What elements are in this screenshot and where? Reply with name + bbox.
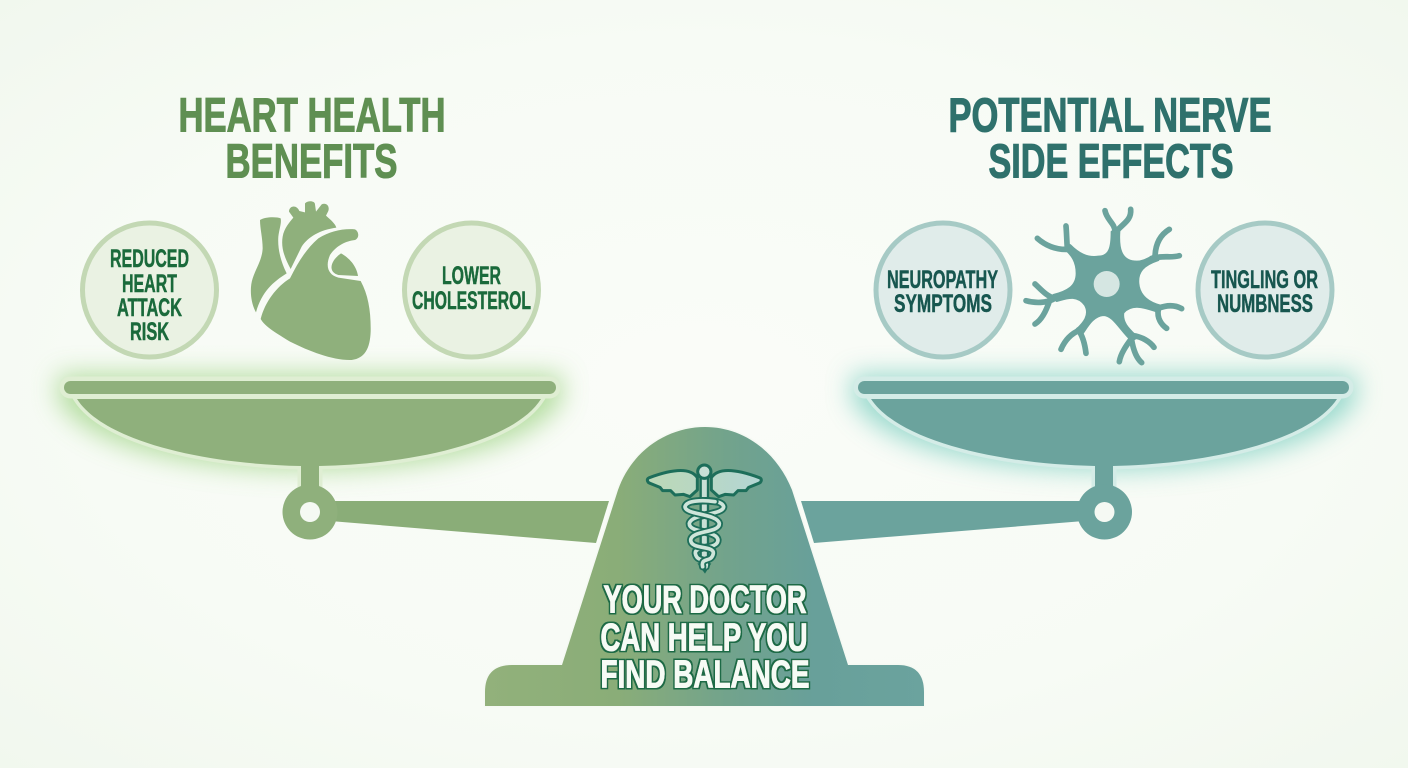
circle: neuropathy symptoms: NEUROPATHY: [887, 266, 998, 294]
base message: your doctor can help you find balance: [600, 578, 810, 696]
heading: potential nerve side effects: POTENTIAL NERVE: [948, 90, 1272, 142]
left scale pan: [58, 374, 562, 492]
scale base: [485, 427, 924, 706]
base message: your doctor can help you find balance: YOUR DOCTOR: [604, 578, 806, 622]
icon: caduceus: [647, 465, 761, 574]
right beam and pivot: [801, 484, 1132, 543]
left beam and pivot: [282, 484, 609, 543]
base message: your doctor can help you find balance: FIND BALANCE: [600, 654, 810, 696]
icon: anatomical heart: [251, 201, 371, 360]
icon: neuron: [1026, 209, 1182, 363]
circle: lower cholesterol: LOWER: [442, 262, 501, 290]
heading: heart health benefits: [178, 90, 446, 188]
circle: tingling or numbness: NUMBNESS: [1217, 290, 1313, 318]
right scale pan: [852, 374, 1356, 492]
circle: reduced heart attack risk: RISK: [130, 318, 169, 346]
heading: heart health benefits: HEART HEALTH: [178, 90, 446, 142]
circle: tingling or numbness: [1198, 223, 1332, 357]
circle: neuropathy symptoms: [876, 223, 1010, 357]
circle: reduced heart attack risk: REDUCED: [110, 245, 189, 273]
circle: neuropathy symptoms: SYMPTOMS: [894, 290, 992, 318]
heading: potential nerve side effects: SIDE EFFECTS: [988, 136, 1234, 188]
circle: lower cholesterol: [404, 223, 538, 357]
circle: lower cholesterol: CHOLESTEROL: [412, 287, 531, 315]
circle: tingling or numbness: TINGLING OR: [1211, 266, 1318, 294]
circle: reduced heart attack risk: [82, 223, 216, 357]
heading: potential nerve side effects: [948, 90, 1272, 188]
heading: heart health benefits: BENEFITS: [226, 136, 398, 188]
circle: reduced heart attack risk: ATTACK: [117, 294, 182, 322]
base message: your doctor can help you find balance: CAN HELP YOU: [600, 616, 808, 660]
circle: reduced heart attack risk: HEART: [122, 270, 177, 298]
